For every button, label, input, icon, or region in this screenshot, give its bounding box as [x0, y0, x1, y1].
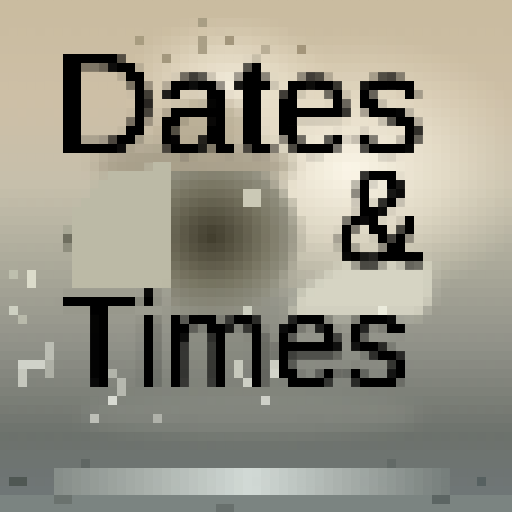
dark centre [171, 171, 306, 315]
title ampersand: & [335, 144, 424, 293]
title text [53, 25, 424, 414]
upper glow [160, 35, 512, 305]
clock face [72, 90, 432, 333]
clock shadow band [95, 141, 295, 189]
title word: Dates: Dates [53, 25, 424, 184]
lower clock dim [170, 290, 285, 390]
top clock highlight [125, 15, 335, 155]
title word: Times: Times [60, 268, 409, 414]
floor glow [80, 393, 420, 437]
floor dark strip [0, 452, 512, 466]
lower right light area [290, 262, 432, 316]
upper dim wedge [160, 97, 250, 153]
floor lower strip [0, 499, 512, 512]
bright floor band [50, 468, 450, 498]
left lobe [72, 165, 168, 292]
